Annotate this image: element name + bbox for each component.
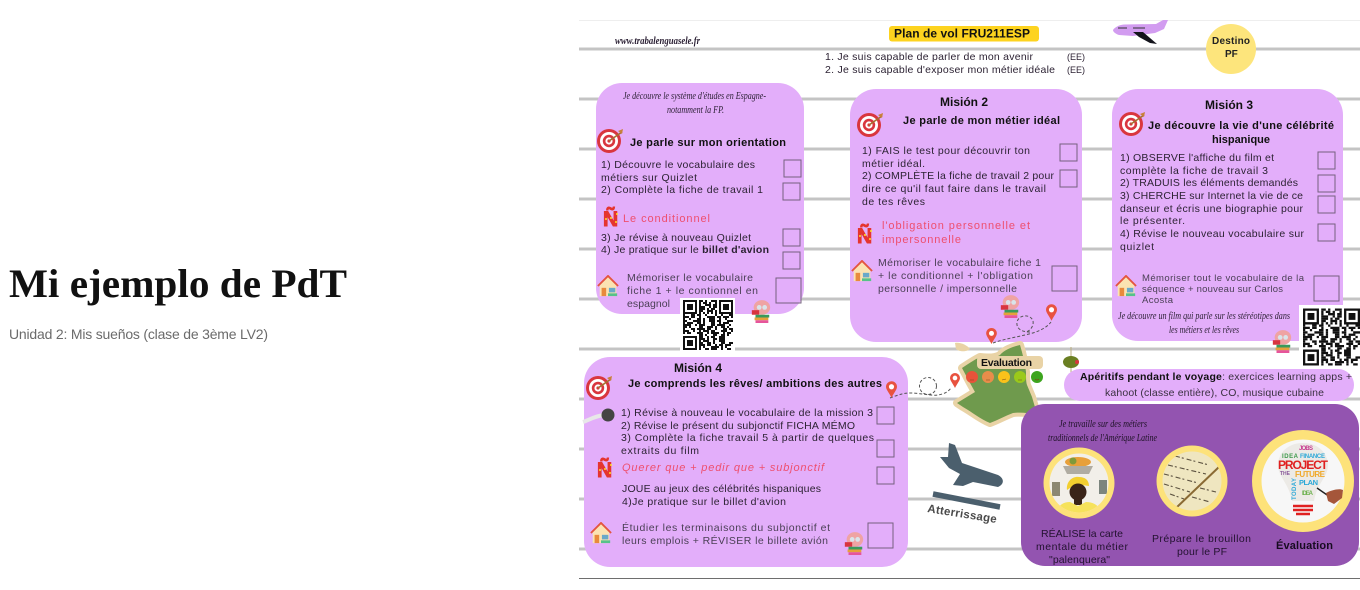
- panel: purple activities: Évaluation: [1276, 539, 1333, 552]
- route from mission 4: [886, 373, 960, 398]
- panel: aperitifs: kahoot (classe entière), CO, musique cubaine: [1105, 387, 1324, 399]
- photo: project lightbulb: JOBS: [1299, 446, 1313, 452]
- objectives: 2. Je suis capable d'exposer mon métier idéale: [825, 64, 1055, 76]
- photo: handwritten draft: [1156, 446, 1228, 516]
- panel: mission 4: 1) Révise à nouveau le vocabulaire de la mission 3: [621, 407, 873, 419]
- panel: mission 3: 3) CHERCHE sur Internet la vie de ce: [1120, 190, 1303, 202]
- panel: mission 1: 3) Je révise à nouveau Quizlet: [601, 232, 751, 244]
- panel: mission 2: l'obligation personnelle et: [882, 220, 1030, 232]
- objectives: (EE): [1067, 52, 1085, 62]
- landing label: Atterrissage: [927, 503, 998, 526]
- photo: project lightbulb: TODAY: [1292, 478, 1298, 500]
- panel: purple activities: "palenquera": [1049, 554, 1110, 566]
- panel: mission 3: Mémoriser tout le vocabulaire de la: [1142, 273, 1305, 284]
- panel: mission 1: Le conditionnel: [623, 213, 710, 225]
- header title pill: Plan de vol FRU211ESP: [894, 26, 1030, 40]
- destination circle: [1206, 24, 1256, 74]
- panel: mission 4: Étudier les terminaisons du subjonctif et: [622, 521, 830, 534]
- panel: purple activities: Prépare le brouillon: [1152, 533, 1251, 545]
- panel: mission 3: complète la fiche de travail 3: [1120, 165, 1268, 177]
- flight plan poster: [579, 20, 1360, 578]
- photo: palenquera: [1044, 448, 1114, 518]
- panel: mission 1: 2) Complète la fiche de travail 1: [601, 184, 763, 196]
- panel: mission 3: 2) TRADUIS les éléments demandés: [1120, 177, 1298, 189]
- panel: mission 1: 4) Je pratique sur le billet d'avion: [601, 244, 769, 256]
- panel: mission 3: 1) OBSERVE l'affiche du film et: [1120, 152, 1274, 164]
- icon: Ñ: Ñ: [603, 208, 618, 231]
- icon: olive: [1063, 347, 1079, 378]
- panel: mission 4: Misión 4: [674, 361, 722, 375]
- panel: mission 2: + le conditionnel + l'obligation: [878, 270, 1033, 282]
- panel: mission 2: personnelle / impersonnelle: [878, 283, 1017, 295]
- panel: aperitifs: Apéritifs pendant le voyage: exercices learning apps +: [1080, 371, 1352, 383]
- icon: house: [1116, 276, 1136, 296]
- icon: reading brain 3: [1273, 330, 1291, 353]
- photo: project lightbulb: IDEA: [1302, 491, 1314, 497]
- panel: mission 1: fiche 1 + le contionnel en: [627, 285, 758, 297]
- destination circle: Destino: [1212, 36, 1250, 47]
- photo: project lightbulb: FINANCE: [1300, 454, 1325, 460]
- subtitle: Unidad 2: Mis sueños (clase de 3ème LV2): [9, 326, 268, 342]
- icon: landing plane: [933, 443, 1003, 507]
- objectives: 1. Je suis capable de parler de mon avenir: [825, 51, 1034, 63]
- panel: mission 1: métiers sur Quizlet: [601, 172, 697, 184]
- panel: mission 4: extraits du film: [621, 445, 699, 457]
- panel: mission 2: de tes rêves: [862, 196, 925, 208]
- panel: mission 2: métier idéal.: [862, 158, 925, 170]
- panel: mission 4: Querer que + pedir que + subjonctif: [622, 462, 825, 474]
- destination circle: PF: [1225, 49, 1238, 60]
- panel: mission 2: Misión 2: [940, 95, 988, 109]
- panel: mission 3: Je découvre un film qui parle sur les stéréotipes dans: [1118, 311, 1290, 322]
- QR code 1: [680, 298, 735, 353]
- panel: mission 3: Je découvre la vie d'une célébrité: [1148, 120, 1334, 132]
- rating faces: [966, 371, 1043, 383]
- panel: mission 4: JOUE au jeux des célébrités hispaniques: [622, 483, 821, 495]
- icon: Ñ: Ñ: [857, 225, 872, 248]
- map of evaluation: [955, 343, 1043, 423]
- icon: reading brain 4: [845, 532, 863, 555]
- panel: mission 3: les métiers et les rêves: [1169, 325, 1239, 336]
- photo: project lightbulb: PLAN: [1299, 478, 1318, 487]
- panel: mission 3: danseur et écris une biographie pour: [1120, 203, 1304, 215]
- panel: mission 3: [1112, 89, 1343, 341]
- panel: mission 3: 4) Révise le nouveau vocabulaire sur: [1120, 228, 1304, 240]
- panel: mission 2: dire ce qu'il faut faire dans le travail: [862, 183, 1046, 195]
- panel: mission 1: [596, 83, 804, 314]
- icon: target: [586, 376, 612, 400]
- icon: lilac plane: [1113, 20, 1168, 44]
- panel: mission 1: espagnol: [627, 298, 670, 310]
- panel: aperitifs: [1064, 369, 1354, 401]
- panel: mission 3: Misión 3: [1205, 98, 1253, 112]
- title: Mi ejemplo de PdT: [9, 261, 347, 306]
- panel: mission 1: Mémoriser le vocabulaire: [627, 272, 753, 284]
- panel: mission 2: impersonnelle: [882, 234, 961, 246]
- panel: mission 3: quizlet: [1120, 241, 1154, 253]
- icon: Ñ: Ñ: [597, 459, 612, 482]
- panel: mission 4: Je comprends les rêves/ ambitions des autres: [628, 378, 882, 390]
- panel: mission 1: Je découvre le système d'études en Espagne-: [623, 91, 766, 102]
- panel: mission 3: le présenter.: [1120, 215, 1185, 227]
- icon: target: [597, 129, 623, 153]
- icon: reading brain 1: [752, 300, 770, 323]
- QR code 2: [1299, 305, 1360, 369]
- panel: mission 3: Acosta: [1142, 295, 1174, 306]
- objectives: [825, 51, 1085, 76]
- panel: purple activities: [1021, 404, 1359, 566]
- photo: project lightbulb: PROJECT: [1278, 458, 1329, 472]
- panel: mission 4: [583, 357, 908, 567]
- objectives: (EE): [1067, 65, 1085, 75]
- panel: purple activities: RÉALISE la carte: [1041, 527, 1123, 540]
- panel: mission 2: Je parle de mon métier idéal: [903, 115, 1060, 127]
- panel: purple activities: Je travaille sur des métiers: [1059, 419, 1147, 430]
- panel: mission 4: 4)Je pratique sur le billet d'avion: [622, 496, 786, 508]
- panel: mission 3: hispanique: [1212, 134, 1270, 146]
- panel: purple activities: traditionnels de l'Amérique Latine: [1048, 433, 1157, 444]
- photo: project lightbulb: [1252, 430, 1354, 532]
- panel: mission 2: 1) FAIS le test pour découvrir ton: [862, 145, 1030, 157]
- panel: purple activities: pour le PF: [1177, 546, 1227, 558]
- panel: purple activities: mentale du métier: [1036, 541, 1128, 553]
- photo: project lightbulb: FUTURE: [1295, 470, 1326, 479]
- panel: mission 1: Je parle sur mon orientation: [630, 137, 786, 149]
- icon: house: [852, 261, 872, 281]
- photo: project lightbulb: IDEA: [1282, 454, 1299, 460]
- icon: film reel: [583, 408, 614, 422]
- icon: target: [1119, 112, 1145, 136]
- panel: mission 2: Mémoriser le vocabulaire fiche 1: [878, 257, 1041, 269]
- panel: mission 4: 3) Complète la fiche travail 5 à partir de quelques: [621, 432, 874, 444]
- panel: mission 2: [850, 89, 1082, 342]
- icon: house: [591, 523, 611, 543]
- header website: www.trabalenguasele.fr: [615, 36, 700, 47]
- icon: target: [857, 113, 883, 137]
- photo: project lightbulb: THE: [1280, 471, 1291, 477]
- panel: mission 2: 2) COMPLÈTE la fiche de travail 2 pour: [862, 169, 1054, 182]
- panel: mission 4: leurs emplois + RÉVISER le billete avión: [622, 534, 828, 547]
- route to evaluation: [986, 304, 1057, 344]
- panel: mission 4: 2) Révise le présent du subjonctif FICHA MÉMO: [621, 419, 855, 432]
- panel: mission 3: séquence + nouveau sur Carlos: [1142, 284, 1283, 295]
- ruled background lines: [579, 20, 1360, 578]
- icon: house: [598, 276, 618, 296]
- icon: reading brain 2: [1001, 295, 1019, 318]
- panel: mission 1: 1) Découvre le vocabulaire des: [601, 159, 755, 171]
- panel: mission 1: notamment la FP.: [667, 105, 724, 116]
- evaluation label: Evaluation: [981, 357, 1032, 369]
